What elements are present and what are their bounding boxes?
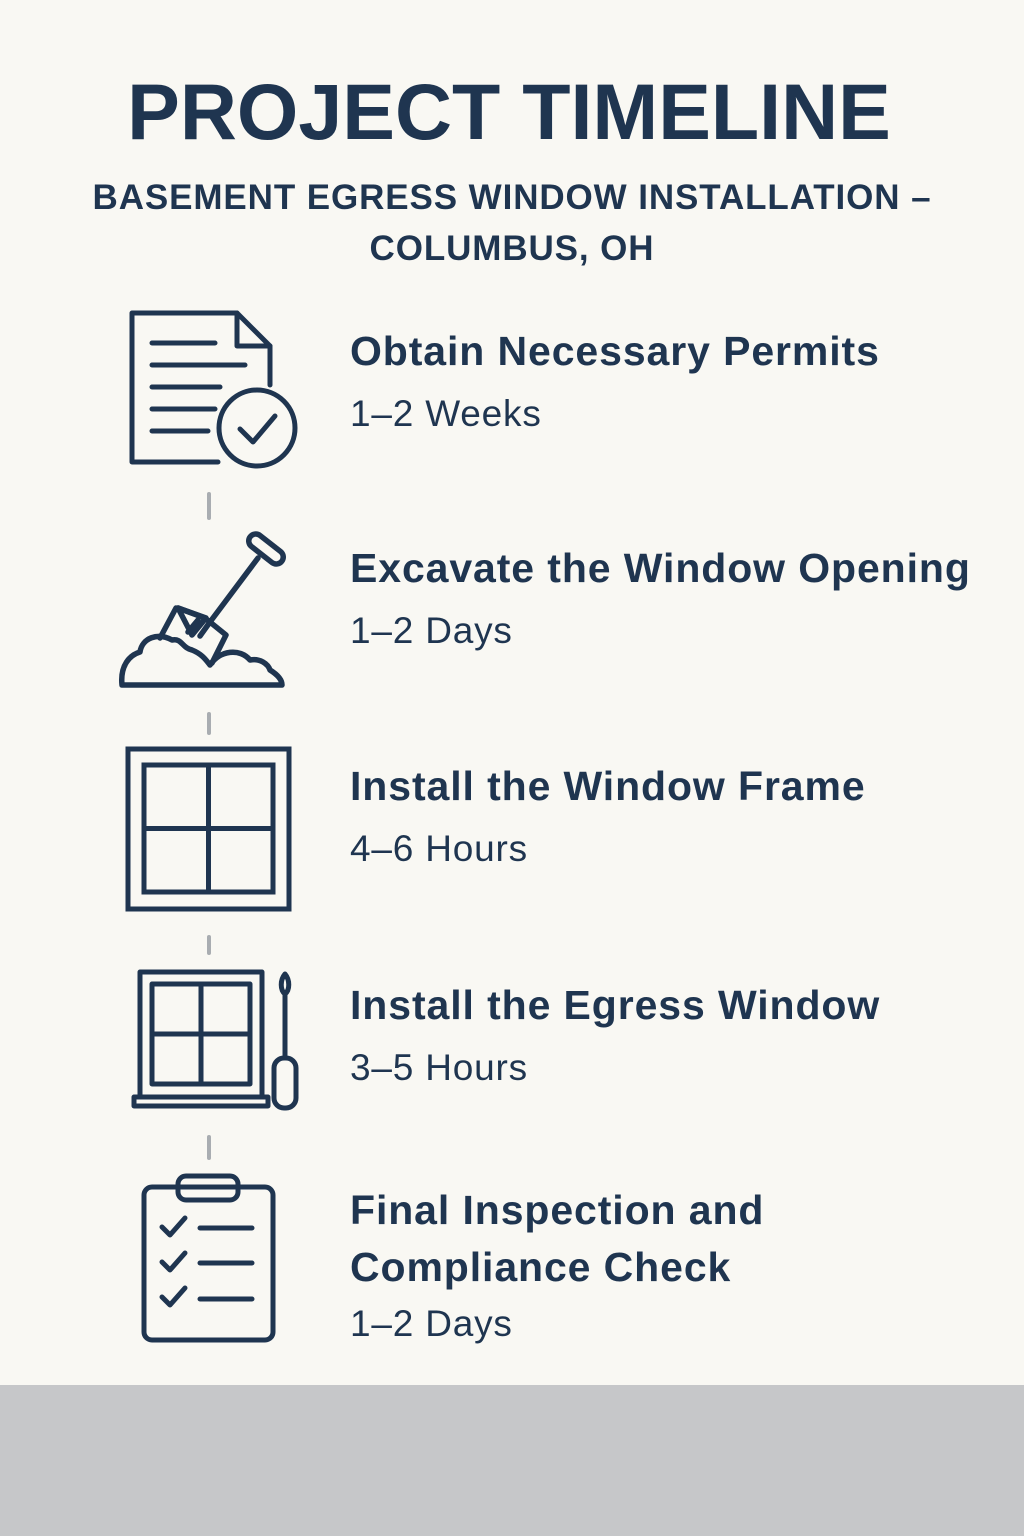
icon: shovel	[119, 531, 286, 688]
step 1 text: Obtain Necessary Permits	[350, 328, 880, 374]
footer band	[0, 1385, 1024, 1536]
subtitle: BASEMENT EGRESS WINDOW INSTALLATION –	[93, 178, 931, 217]
title: PROJECT TIMELINE	[127, 67, 891, 156]
step 5 text: Final Inspection and	[350, 1187, 764, 1233]
text: 4–6 Hours	[350, 828, 528, 869]
step 5 text	[350, 1187, 764, 1290]
icon: window frame	[126, 746, 292, 912]
step 2 text: Excavate the Window Opening	[350, 545, 971, 591]
text: 3–5 Hours	[350, 1047, 528, 1088]
subtitle	[93, 178, 931, 268]
icon: egress window with screwdriver	[132, 970, 298, 1110]
text: 1–2 Days	[350, 1303, 513, 1344]
step 3 text: Install the Window Frame	[350, 763, 866, 809]
text: 1–2 Weeks	[350, 393, 542, 434]
text: 1–2 Days	[350, 610, 513, 651]
step 5 text: Compliance Check	[350, 1244, 731, 1290]
step 4 text: Install the Egress Window	[350, 982, 880, 1028]
icon: clipboard checklist	[142, 1174, 276, 1342]
subtitle: COLUMBUS, OH	[370, 229, 654, 268]
icon: permit document	[130, 310, 298, 468]
